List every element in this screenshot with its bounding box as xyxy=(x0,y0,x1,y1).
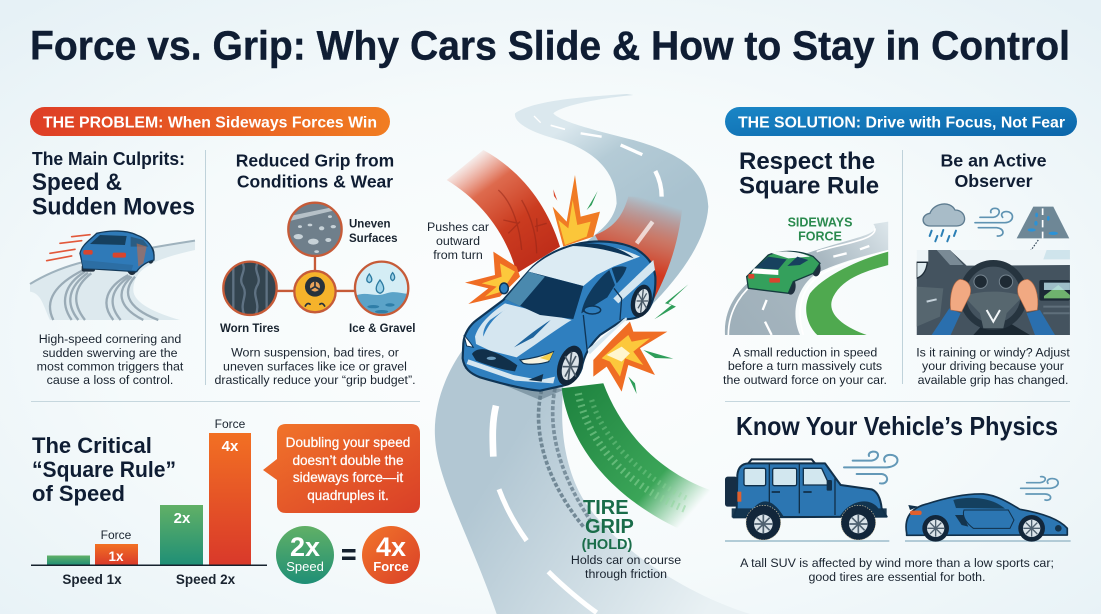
heading: know your vehicle's physics: Know Your Vehicle’s Physics xyxy=(736,411,1058,441)
text: grip description: uneven surfaces like ice or gravel xyxy=(223,360,407,374)
text: grip description: Worn suspension, bad tires, or xyxy=(231,346,399,360)
icon: rain cloud xyxy=(923,204,965,241)
tire tread on road xyxy=(539,390,583,527)
grille and lights xyxy=(472,349,517,371)
heading: square rule: The Critical xyxy=(32,433,152,458)
problem banner xyxy=(30,107,390,136)
text: culprits description: High-speed cornering and xyxy=(39,332,181,346)
side windows xyxy=(581,270,615,313)
equation: 2x speed equals 4x force: Speed xyxy=(286,559,324,574)
bar chart: 2x xyxy=(174,510,191,527)
heading: respect the square rule: Respect the xyxy=(739,148,875,175)
callout: quadruples it. xyxy=(307,488,389,503)
red motion blur on road xyxy=(595,197,683,307)
bar chart: Force xyxy=(101,528,132,542)
text: grip description: drastically reduce your “grip budget”. xyxy=(214,373,416,387)
heading: square rule: “Square Rule” xyxy=(32,457,176,482)
callout: sideways force—it xyxy=(293,470,403,485)
label: pushes car outward: outward xyxy=(436,234,480,248)
label: tire grip: (HOLD) xyxy=(582,537,633,553)
panel: the problem xyxy=(30,107,416,387)
label: pushes car outward: Pushes car xyxy=(427,220,489,234)
icon: blue car xyxy=(463,241,655,400)
label: tire grip: Holds car on course xyxy=(571,553,681,567)
text: physics description: good tires are essential for both. xyxy=(808,570,986,584)
text: culprits description: sudden swerving are the xyxy=(42,346,178,360)
callout: Doubling your speed xyxy=(286,435,410,450)
text: respect description: the outward force on your car. xyxy=(723,373,887,387)
label: tire grip: TIRE xyxy=(583,497,629,519)
illustration: skidding car xyxy=(30,231,195,320)
heading: main culprits: The Main Culprits: xyxy=(32,149,185,169)
text: physics description: A tall SUV is affected by wind more than a low sports car; xyxy=(740,556,1054,570)
illustration: car on curve xyxy=(725,222,888,335)
label: tire grip xyxy=(571,497,681,581)
bar chart: Force xyxy=(215,417,246,431)
heading: square rule: of Speed xyxy=(32,481,125,506)
heading: main culprits xyxy=(32,149,195,220)
wheels xyxy=(552,342,588,389)
heading: respect the square rule: Square Rule xyxy=(739,172,879,200)
callout: doesn’t double the xyxy=(292,453,404,468)
problem banner: THE PROBLEM: When Sideways Forces Win xyxy=(43,114,377,132)
icon: dashboard and steering wheel xyxy=(917,250,1070,335)
bar chart: Speed 2x xyxy=(176,572,236,587)
text: culprits description: cause a loss of control. xyxy=(47,373,173,387)
roof xyxy=(528,245,640,286)
label: worn tires: Worn Tires xyxy=(220,323,280,335)
icon: impact bursts xyxy=(465,175,688,394)
bar chart: Speed 1x xyxy=(62,572,122,587)
tire grip band xyxy=(562,383,710,537)
panel: square rule of speed xyxy=(31,417,420,587)
road upper section xyxy=(515,94,708,307)
label: tire grip: GRIP xyxy=(585,516,634,538)
label: uneven surfaces: Surfaces xyxy=(349,233,398,245)
bar chart: 1x xyxy=(108,549,124,564)
icon: ice and gravel xyxy=(353,262,410,317)
icon: wet road xyxy=(1017,207,1069,238)
illustration: observing conditions xyxy=(917,204,1070,335)
text: culprits description: most common triggers that xyxy=(37,360,184,374)
label: sideways force: FORCE xyxy=(798,230,842,244)
heading: main culprits: Sudden Moves xyxy=(32,194,195,220)
heading: reduced grip: Conditions & Wear xyxy=(237,172,393,192)
panel: vehicle physics xyxy=(725,411,1071,584)
panel: the solution xyxy=(723,107,1077,387)
heading: reduced grip: Reduced Grip from xyxy=(236,150,394,170)
sideways force band xyxy=(447,150,560,273)
icon: sports car xyxy=(905,477,1071,542)
icon: sliding wheel xyxy=(294,271,336,312)
central illustration xyxy=(435,94,750,614)
icon: SUV xyxy=(725,452,897,541)
text: observer description: your driving because your xyxy=(922,359,1064,373)
heading: active observer: Be an Active xyxy=(940,150,1047,170)
label: ice and gravel: Ice & Gravel xyxy=(349,323,415,335)
icon: wind xyxy=(975,208,1012,236)
solution banner: THE SOLUTION: Drive with Focus, Not Fear xyxy=(738,114,1065,132)
title: Force vs. Grip: Why Cars Slide & How to Stay in Control xyxy=(30,22,1070,68)
equation: 2x speed equals 4x force: Force xyxy=(373,559,409,574)
windshield xyxy=(505,272,583,319)
text: respect description: before a turn massively cuts xyxy=(728,359,882,373)
callout xyxy=(263,424,420,513)
lane dashes xyxy=(493,116,662,613)
equation: 2x speed equals 4x force: 2x xyxy=(290,532,320,562)
equation: 2x speed equals 4x force: 4x xyxy=(376,532,406,562)
hood xyxy=(475,303,572,357)
bar chart xyxy=(31,417,267,587)
label: sideways force: SIDEWAYS xyxy=(788,216,852,230)
label: tire grip: through friction xyxy=(585,567,667,581)
label: pushes car outward: from turn xyxy=(433,248,483,262)
diagram: grip factors xyxy=(220,203,415,335)
text: respect description: A small reduction in speed xyxy=(733,346,877,360)
bar chart: 4x xyxy=(222,438,239,455)
road lower section xyxy=(435,350,750,614)
icon: wind on SUV xyxy=(844,452,897,484)
label: uneven surfaces: Uneven xyxy=(349,218,391,230)
icon: worn tire xyxy=(223,262,277,317)
text: observer description: available grip has changed. xyxy=(918,373,1068,387)
mirrors xyxy=(584,306,601,314)
text: observer description: Is it raining or windy? Adjust xyxy=(916,346,1070,360)
equation: 2x speed equals 4x force xyxy=(276,526,420,584)
heading: active observer: Observer xyxy=(954,171,1033,191)
icon: uneven surface xyxy=(287,203,343,256)
heading: main culprits: Speed & xyxy=(32,169,122,196)
solution banner xyxy=(725,107,1077,136)
icon: wind on sports car xyxy=(1021,477,1058,500)
